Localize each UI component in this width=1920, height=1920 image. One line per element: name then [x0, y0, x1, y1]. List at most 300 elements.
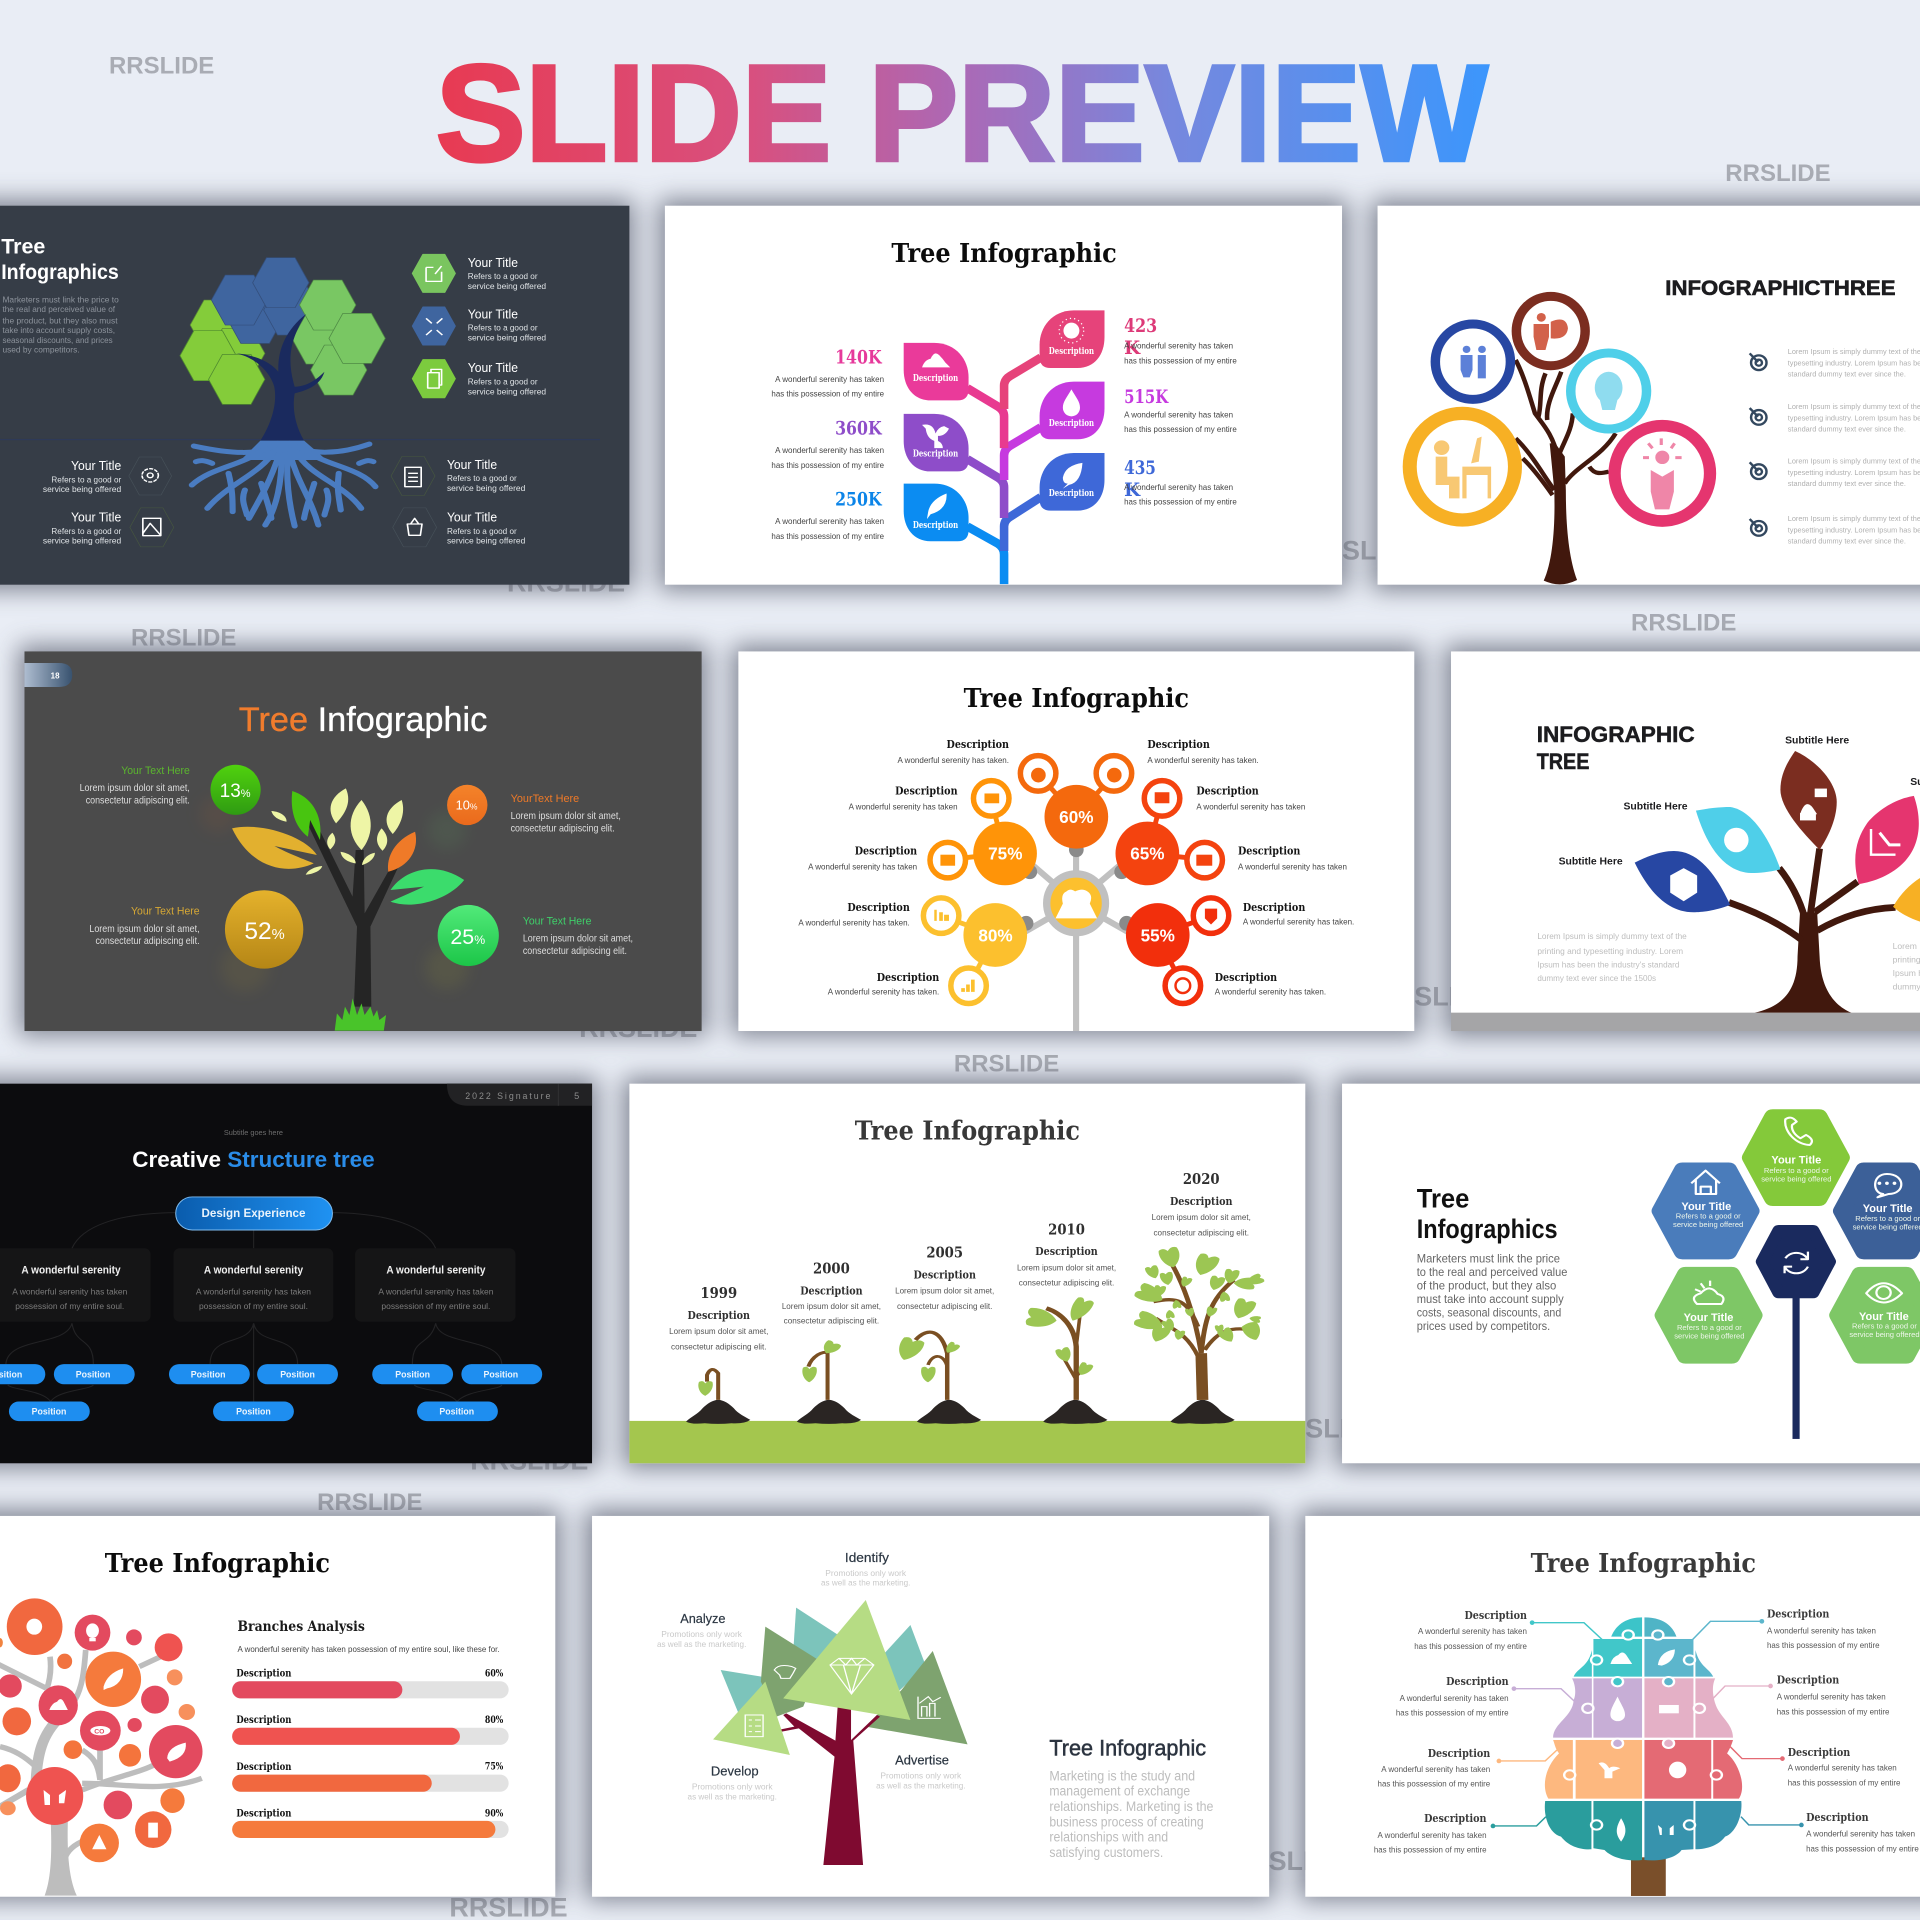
description titles: Description — [1777, 1674, 1839, 1687]
panel: slide 4 dark percent tree: 18 — [51, 671, 60, 680]
hex icons — [1691, 1118, 1902, 1304]
lorem text: consectetur adipiscing elit. — [671, 1341, 767, 1351]
stat values: K — [1124, 338, 1141, 359]
item text: as well as the marketing. — [657, 1639, 746, 1649]
card text: A wonderful serenity has taken — [196, 1286, 311, 1296]
tree illustration — [713, 1600, 968, 1865]
descriptions: has this possession of my entire — [1124, 356, 1237, 366]
description titles: Description — [1464, 1609, 1527, 1622]
stat values: 140K — [835, 348, 883, 369]
description text: A wonderful serenity has taken — [1788, 1763, 1897, 1773]
card text: possession of my entire soul. — [199, 1301, 308, 1311]
section heading: Branches Analysis — [238, 1619, 365, 1635]
descriptions: has this possession of my entire — [771, 531, 884, 541]
descriptions: A wonderful serenity has taken — [1124, 410, 1233, 420]
body text right — [1893, 941, 1920, 991]
hex sublabels: Refers to a good or — [1677, 1323, 1742, 1332]
labels sub text: Refers to a good or — [468, 376, 538, 386]
panel: slide 6 petal tree: TREE — [1537, 749, 1589, 774]
description titles — [1424, 1608, 1869, 1825]
description titles: Description — [1788, 1746, 1850, 1759]
bar labels: 75% — [485, 1761, 504, 1772]
labels sub text: service being offered — [43, 484, 121, 494]
description titles: Description — [1446, 1675, 1509, 1688]
text block: of the product, but they also — [1417, 1278, 1556, 1292]
watermarks: RRSLIDE — [317, 1489, 422, 1516]
item headings: Develop — [711, 1764, 759, 1779]
descriptions: A wonderful serenity has taken — [775, 516, 884, 526]
years: 2010 — [1048, 1221, 1085, 1238]
percent circles: 55% — [1141, 926, 1175, 946]
text block — [2, 294, 119, 355]
labels sub text: service being offered — [447, 536, 526, 546]
labels sub text: service being offered — [468, 332, 546, 342]
description titles: Description — [847, 901, 910, 914]
hex labels: Your Title — [1863, 1203, 1913, 1215]
percent circles — [210, 765, 499, 969]
hub — [1047, 874, 1105, 933]
hex labels: Your Title — [1771, 1154, 1821, 1166]
hex labels — [1681, 1154, 1913, 1324]
description text: A wonderful serenity has taken — [808, 861, 917, 871]
lorem text: consectetur adipiscing elit. — [1019, 1278, 1114, 1288]
labels sub text: Refers to a good or — [447, 473, 517, 483]
plants — [686, 1246, 1265, 1424]
stat values — [835, 316, 1169, 511]
description text: A wonderful serenity has taken — [1777, 1692, 1886, 1702]
body text left: dummy text ever since the 1500s — [1537, 973, 1656, 983]
percent circles: 60% — [1059, 807, 1093, 827]
labels sub text — [43, 271, 546, 546]
bubble tree — [0, 1598, 203, 1896]
position labels: Position — [280, 1370, 315, 1380]
leaf icons — [922, 318, 1084, 519]
callout descriptions: Lorem ipsum dolor sit amet, — [523, 934, 633, 945]
position labels: Position — [395, 1370, 430, 1380]
stat values: 423 — [1124, 316, 1157, 337]
description titles: Description — [1147, 738, 1210, 751]
description titles: Description — [877, 971, 939, 984]
lorem text: Lorem ipsum dolor sit amet, — [1152, 1212, 1251, 1222]
description text: A wonderful serenity has taken — [1767, 1625, 1876, 1635]
text block: Marketers must link the price to — [2, 294, 119, 304]
title: SLIDE PREVIEW — [436, 37, 1488, 190]
heading: Tree Infographic — [105, 1548, 330, 1579]
leaf labels: Description — [1049, 489, 1094, 499]
callout descriptions — [80, 783, 633, 957]
hex sublabels: Refers to a good or — [1852, 1322, 1917, 1331]
description text: has this possession of my entire — [1777, 1706, 1890, 1716]
leaf labels: Description — [1049, 419, 1094, 429]
card headings: A wonderful serenity — [21, 1264, 121, 1276]
panel: slide 6 petal tree — [1451, 651, 1920, 1031]
text block: must take into account supply — [1417, 1292, 1564, 1306]
description text — [798, 755, 1354, 996]
lorem text: consectetur adipiscing elit. — [784, 1316, 879, 1326]
callout labels — [121, 765, 591, 927]
position labels: Position — [191, 1370, 226, 1380]
root button — [176, 1197, 332, 1230]
card text: A wonderful serenity has taken — [378, 1286, 494, 1296]
panel: slide 8 growth timeline — [629, 1084, 1305, 1463]
years: 1999 — [700, 1285, 737, 1302]
labels sub text: Refers to a good or — [51, 526, 121, 536]
stat values: K — [1124, 480, 1141, 501]
lorem text — [669, 1212, 1251, 1351]
descriptions — [771, 340, 1237, 541]
labels sub text: service being offered — [468, 281, 546, 291]
callout labels: YourText Here — [511, 793, 579, 805]
text block: the real and perceived value of — [2, 304, 116, 314]
body text rows: standard dummy text ever since the. — [1788, 479, 1906, 488]
watermarks: RRSLIDE — [507, 567, 625, 597]
description titles: Description — [855, 845, 917, 858]
descriptions: Description — [800, 1284, 863, 1297]
panel: slide 10 bubble tree with bars — [0, 1516, 555, 1897]
leaf labels: Description — [913, 374, 959, 384]
bar labels: 90% — [485, 1809, 504, 1820]
descriptions: Description — [1035, 1245, 1098, 1258]
labels right: Your Title — [71, 510, 121, 525]
description text — [1374, 1625, 1919, 1855]
root button: Design Experience — [201, 1207, 306, 1220]
lorem text: consectetur adipiscing elit. — [897, 1301, 992, 1311]
position labels: Position — [483, 1370, 518, 1380]
description titles: Description — [947, 738, 1009, 751]
description titles: Description — [1238, 845, 1301, 858]
subtitle: Subtitle goes here — [224, 1128, 283, 1137]
descriptions: Description — [688, 1309, 750, 1322]
descriptions: A wonderful serenity has taken — [775, 374, 884, 384]
subtitles: Subtitle Here — [1623, 801, 1688, 812]
leaf labels: Description — [1049, 347, 1094, 357]
text block — [1049, 1768, 1213, 1860]
text block — [1417, 1251, 1568, 1333]
stat values: 515K — [1124, 387, 1169, 408]
leaf labels: Description — [913, 521, 959, 531]
text block: Marketing is the study and — [1049, 1768, 1195, 1783]
tree illustration — [232, 788, 464, 1031]
watermarks: SLIDE — [1414, 981, 1494, 1011]
bar labels: Description — [236, 1809, 291, 1820]
hex sublabels: service being offered — [1673, 1220, 1743, 1229]
labels sub text: Refers to a good or — [447, 526, 517, 536]
card headings: A wonderful serenity — [386, 1264, 486, 1276]
item text: as well as the marketing. — [876, 1780, 966, 1790]
hex sublabels: Refers to a good or — [1764, 1166, 1829, 1175]
watermarks: RRSLIDE — [954, 1050, 1059, 1077]
hex sublabels: service being offered — [1674, 1331, 1744, 1340]
stat values: 360K — [835, 419, 883, 440]
text block: satisfying customers. — [1049, 1845, 1163, 1860]
heading: Tree Infographic — [1049, 1735, 1206, 1760]
watermarks: SLIDE — [1269, 1846, 1348, 1876]
text block: Marketers must link the price — [1417, 1251, 1560, 1265]
leaves — [1635, 751, 1920, 922]
item text — [657, 1568, 966, 1801]
text block: relationships with and — [1049, 1830, 1168, 1845]
body text rows: standard dummy text ever since the. — [1788, 537, 1906, 546]
watermarks: RRSLIDE — [1725, 160, 1831, 187]
description text: A wonderful serenity has taken. — [828, 986, 939, 996]
labels right: Your Title — [468, 255, 518, 270]
description text: A wonderful serenity has taken — [1378, 1830, 1487, 1840]
labels right — [71, 255, 518, 525]
item headings: Analyze — [680, 1611, 726, 1626]
descriptions: has this possession of my entire — [1124, 496, 1237, 506]
labels right: Your Title — [468, 306, 518, 321]
description titles: Description — [1428, 1747, 1490, 1760]
description text: A wonderful serenity has taken — [1400, 1693, 1509, 1703]
percent circles: 65% — [1130, 844, 1164, 864]
position labels: Position — [32, 1406, 66, 1416]
watermarks: RRSLIDE — [1631, 610, 1736, 637]
bar labels: 60% — [485, 1668, 504, 1679]
description titles: Description — [1196, 785, 1259, 798]
hex labels: Your Title — [1681, 1201, 1731, 1213]
bar fills — [232, 1681, 495, 1838]
heading: Tree Infographic — [964, 683, 1189, 714]
bar tracks — [232, 1681, 509, 1838]
description text: A wonderful serenity has taken — [849, 801, 958, 811]
description titles: Description — [1424, 1812, 1487, 1825]
labels sub text: service being offered — [468, 386, 546, 396]
bar labels: Description — [236, 1762, 291, 1773]
position labels: Position — [439, 1406, 474, 1416]
heading: Tree Infographic — [855, 1115, 1080, 1146]
item headings: Identify — [845, 1550, 890, 1565]
labels sub text: Refers to a good or — [51, 474, 121, 484]
descriptions: A wonderful serenity has taken — [1124, 482, 1233, 492]
small rings — [923, 756, 1229, 1003]
bubble tree: CO — [94, 1728, 104, 1735]
percent circles: 13% — [220, 781, 251, 802]
item text: Promotions only work — [880, 1771, 962, 1781]
watermarks: SLIDE — [1342, 536, 1421, 566]
card headings: A wonderful serenity — [204, 1264, 303, 1276]
tree illustration — [1410, 296, 1767, 584]
connectors — [1016, 845, 1136, 1031]
panel: slide 11 triangle tree — [592, 1516, 1269, 1897]
percent circles — [963, 785, 1190, 967]
page tab: 5 — [574, 1091, 579, 1101]
hex sublabels — [1673, 1166, 1920, 1340]
description text: A wonderful serenity has taken. — [1243, 916, 1354, 926]
description text: A wonderful serenity has taken — [1418, 1626, 1527, 1636]
panel: slide 9 white hexagon flower — [1342, 1084, 1920, 1463]
callout labels: Your Text Here — [131, 906, 200, 918]
heading: Creative Structure tree — [132, 1147, 375, 1172]
page badge — [24, 663, 72, 687]
watermarks: RRSLIDE — [579, 1013, 697, 1043]
leaf labels: Description — [913, 450, 959, 460]
card text: possession of my entire soul. — [15, 1301, 124, 1311]
labels right: Your Title — [447, 457, 497, 472]
text block: management of exchange — [1049, 1784, 1190, 1799]
text block: relationships. Marketing is the — [1049, 1799, 1213, 1814]
heading: Tree Infographic — [1531, 1548, 1756, 1579]
years: 2020 — [1183, 1171, 1220, 1188]
descriptions: A wonderful serenity has taken — [1124, 340, 1233, 350]
labels sub text: service being offered — [447, 483, 526, 493]
position labels: Position — [236, 1406, 271, 1416]
description text: has this possession of my entire — [1396, 1708, 1509, 1718]
watermarks: RRSLIDE — [470, 1445, 588, 1475]
ring icons — [934, 768, 1217, 993]
bar labels: 80% — [485, 1715, 504, 1726]
descriptions: has this possession of my entire — [1124, 424, 1237, 434]
descriptions: A wonderful serenity has taken — [775, 445, 884, 455]
heading: Tree Infographic — [239, 701, 487, 739]
hexagon icons right — [129, 254, 455, 547]
position labels — [0, 1370, 518, 1416]
subtitles — [1559, 735, 1920, 867]
heading: INFOGRAPHICTHREE — [1665, 276, 1896, 300]
panel: slide 1 dark hexagon tree: Infographics — [1, 260, 119, 284]
page tab: 2022 Signature — [465, 1091, 552, 1101]
item headings — [680, 1550, 949, 1779]
percent circles: 75% — [988, 844, 1022, 864]
body text left: Ipsum has been the industry's standard — [1537, 959, 1680, 969]
heading: Tree Infographic — [891, 238, 1117, 269]
percent circles: 25% — [450, 925, 485, 949]
heading: Tree — [1417, 1183, 1469, 1213]
lorem text: Lorem ipsum dolor sit amet, — [895, 1286, 994, 1296]
ground — [629, 1421, 1305, 1463]
callout descriptions: Lorem ipsum dolor sit amet, — [511, 811, 621, 822]
panel: slide 9 white hexagon flower: Infographics — [1417, 1214, 1558, 1244]
descriptions: has this possession of my entire — [771, 460, 884, 470]
description text: A wonderful serenity has taken. — [798, 918, 910, 928]
years: 2005 — [926, 1245, 963, 1262]
watermarks: SLIDE — [1305, 1414, 1385, 1444]
hexagon flower — [1660, 1116, 1920, 1439]
lorem text: Lorem ipsum dolor sit amet, — [782, 1301, 881, 1311]
description text: has this possession of my entire — [1414, 1641, 1527, 1651]
item text: Promotions only work — [825, 1568, 907, 1578]
descriptions: has this possession of my entire — [771, 389, 884, 399]
panel: slide 7 dark structure tree — [0, 1084, 592, 1463]
circle icons — [1434, 313, 1682, 509]
hex sublabels: Refers to a good or — [1676, 1211, 1741, 1220]
callout descriptions: Lorem ipsum dolor sit amet, — [89, 924, 200, 935]
panel: slide 5 orange molecule tree — [738, 651, 1414, 1031]
labels right: Your Title — [468, 360, 518, 375]
description text: has this possession of my entire — [1374, 1845, 1487, 1855]
description titles: Description — [1806, 1811, 1869, 1824]
bar labels: Description — [236, 1715, 291, 1726]
description text: has this possession of my entire — [1378, 1779, 1490, 1789]
glow under circles — [200, 796, 469, 992]
labels sub text: Refers to a good or — [468, 323, 538, 333]
body text left: Lorem Ipsum is simply dummy text of the — [1537, 931, 1687, 941]
connector lines — [6, 1213, 502, 1402]
item headings: Advertise — [895, 1752, 949, 1767]
hex sublabels: Refers to a good or — [1855, 1214, 1920, 1223]
percent circles: 80% — [978, 926, 1013, 946]
description text: has this possession of my entire — [1788, 1777, 1901, 1787]
watermarks: RRSLIDE — [131, 624, 236, 651]
lorem text: consectetur adipiscing elit. — [1153, 1228, 1249, 1238]
text block: to the real and perceived value — [1417, 1265, 1568, 1279]
description titles: Description — [1243, 901, 1305, 914]
connectors — [1493, 1621, 1801, 1826]
callout descriptions: Lorem ipsum dolor sit amet, — [80, 783, 190, 794]
hex labels: Your Title — [1859, 1311, 1909, 1323]
body text rows: standard dummy text ever since the. — [1788, 425, 1906, 434]
body text left: printing and typesetting industry. Lorem — [1537, 946, 1683, 956]
percent circles: 10% — [456, 797, 478, 812]
years — [700, 1171, 1220, 1302]
subtitles: Subtitle Here — [1785, 735, 1849, 746]
cards — [0, 1248, 516, 1322]
card text: A wonderful serenity has taken — [12, 1286, 128, 1296]
text block: costs, seasonal discounts, and — [1417, 1305, 1561, 1319]
page tab — [447, 1084, 592, 1106]
hex sublabels: service being offered — [1849, 1330, 1920, 1339]
description titles: Description — [895, 785, 958, 798]
bar labels — [236, 1668, 504, 1820]
puzzle tree — [1491, 1617, 1804, 1896]
labels right: Your Title — [447, 510, 497, 525]
card text — [12, 1286, 494, 1311]
stat values: 250K — [835, 490, 883, 511]
panel: slide 1 dark hexagon tree — [0, 206, 629, 585]
text block: take into account supply costs, — [2, 325, 115, 335]
descriptions: Description — [1170, 1195, 1233, 1208]
description text: A wonderful serenity has taken. — [898, 755, 1009, 765]
lorem text: Lorem ipsum dolor sit amet, — [1017, 1262, 1116, 1272]
item text: Promotions only work — [692, 1782, 773, 1792]
card text: possession of my entire soul. — [381, 1301, 490, 1311]
lorem text: Lorem ipsum dolor sit amet, — [669, 1326, 768, 1336]
item text: as well as the marketing. — [821, 1578, 910, 1588]
description text: A wonderful serenity has taken — [1806, 1829, 1915, 1839]
stems — [967, 358, 1041, 584]
description text: A wonderful serenity has taken — [1196, 801, 1306, 811]
body text rows: standard dummy text ever since the. — [1788, 370, 1906, 379]
hex labels: Your Title — [1684, 1312, 1733, 1324]
leaf labels — [913, 347, 1094, 531]
circles — [1410, 296, 1710, 521]
description text: has this possession of my entire — [1767, 1640, 1880, 1650]
callout descriptions: consectetur adipiscing elit. — [523, 946, 627, 957]
percent circles: 52% — [244, 918, 285, 945]
leaf icons — [1670, 789, 1900, 901]
subtitles: Subtitle Here — [1559, 856, 1623, 867]
callout descriptions: consectetur adipiscing elit. — [96, 936, 200, 947]
bar labels: Description — [236, 1668, 291, 1679]
callout labels: Your Text Here — [121, 765, 190, 777]
callout labels: Your Text Here — [523, 915, 591, 927]
stalks — [942, 774, 1211, 986]
text block: used by competitors. — [2, 345, 80, 355]
stat values: 435 — [1124, 458, 1156, 479]
callout descriptions: consectetur adipiscing elit. — [86, 795, 190, 806]
text block: the product, but they also must — [2, 315, 118, 325]
description text: A wonderful serenity has taken. — [1147, 755, 1259, 765]
text block: prices used by competitors. — [1417, 1319, 1550, 1333]
text block: seasonal discounts, and prices — [2, 335, 113, 345]
watermarks: RRSLIDE — [109, 52, 214, 79]
panel: slide 3 circle tree — [1378, 206, 1920, 585]
body text left — [1537, 931, 1687, 983]
item text: as well as the marketing. — [688, 1791, 777, 1801]
heading: Tree — [1, 234, 45, 258]
labels sub text: service being offered — [43, 536, 121, 546]
panel: slide 12 puzzle tree — [1305, 1516, 1920, 1897]
descriptions: Description — [913, 1268, 976, 1281]
